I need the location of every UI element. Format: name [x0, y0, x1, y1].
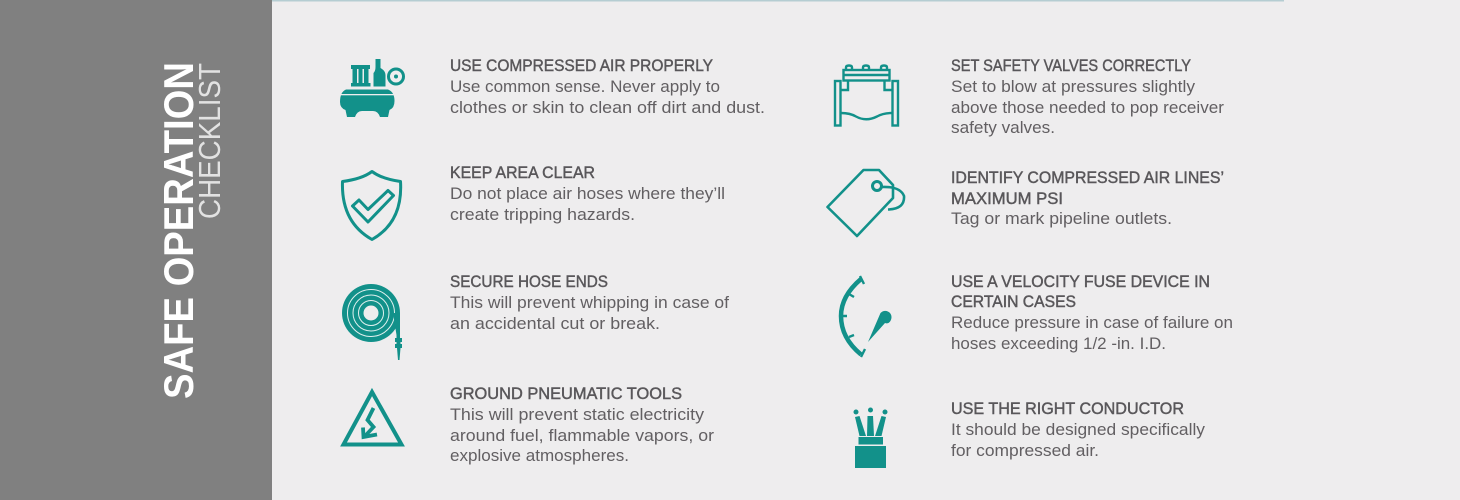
text: secure hose ends — [450, 273, 729, 333]
heading: safe operation: SAFE OPERATION — [155, 62, 202, 399]
text: ground pneumatic tools: GROUND PNEUMATIC TOOLS — [450, 385, 682, 403]
text: identify compressed air lines — [951, 169, 1224, 228]
panel: use a velocity fuse device — [841, 273, 1233, 357]
panel: sidebar — [0, 0, 272, 500]
panel: use the right conductor — [854, 400, 1206, 468]
text: use the right conductor: for compressed air. — [951, 442, 1099, 460]
text: identify compressed air lines: MAXIMUM PSI — [951, 190, 1063, 208]
text: secure hose ends: SECURE HOSE ENDS — [450, 273, 608, 291]
icon: velocity gauge — [841, 276, 892, 357]
text: set safety valves correctly: above those needed to pop receiver — [951, 99, 1225, 117]
text: use a velocity fuse device — [951, 273, 1233, 353]
text: keep area clear: Do not place air hoses where they’ll — [450, 185, 725, 203]
icon: conductor cable — [854, 408, 888, 468]
text: identify compressed air lines: IDENTIFY COMPRESSED AIR LINES’ — [951, 169, 1224, 187]
panel: identify compressed air lines — [828, 169, 1224, 236]
text: use the right conductor — [951, 400, 1206, 460]
icon: shield with check — [342, 172, 401, 240]
text: use a velocity fuse device: hoses exceeding 1/2 -in. I.D. — [951, 335, 1166, 353]
subheading: checklist: CHECKLIST — [192, 63, 227, 219]
icon: electrical warning triangle — [344, 392, 402, 444]
text: keep area clear — [450, 164, 725, 224]
text: secure hose ends: an accidental cut or break. — [450, 315, 660, 333]
text: use a velocity fuse device: USE A VELOCITY FUSE DEVICE IN — [951, 273, 1210, 291]
text: set safety valves correctly: SET SAFETY VALVES CORRECTLY — [951, 57, 1191, 75]
icon: coiled hose — [342, 284, 402, 360]
text: use compressed air properly: USE COMPRESSED AIR PROPERLY — [450, 57, 713, 75]
panel: secure hose ends — [342, 273, 729, 360]
text: use a velocity fuse device: Reduce pressure in case of failure on — [951, 314, 1233, 332]
text: use a velocity fuse device: CERTAIN CASES — [951, 293, 1076, 311]
text: use compressed air properly: Use common sense. Never apply to — [450, 78, 720, 96]
text: ground pneumatic tools — [450, 385, 715, 465]
panel: keep area clear — [342, 164, 725, 240]
icon: air compressor — [340, 59, 404, 117]
text: set safety valves correctly — [951, 57, 1225, 137]
text: keep area clear: create tripping hazards. — [450, 206, 635, 224]
text: ground pneumatic tools: around fuel, flammable vapors, or — [450, 427, 715, 445]
text: secure hose ends: This will prevent whipping in case of — [450, 294, 729, 312]
text: set safety valves correctly: Set to blow at pressures slightly — [951, 78, 1196, 96]
text: ground pneumatic tools: This will prevent static electricity — [450, 406, 705, 424]
icon: safety valve — [835, 66, 898, 126]
text: ground pneumatic tools: explosive atmospheres. — [450, 447, 629, 465]
text: identify compressed air lines: Tag or mark pipeline outlets. — [951, 210, 1172, 228]
text: use the right conductor: It should be designed specifically — [951, 421, 1206, 439]
panel: set safety valves correctly — [835, 57, 1225, 137]
icon: tag — [828, 170, 904, 236]
text: use compressed air properly: clothes or skin to clean off dirt and dust. — [450, 99, 765, 117]
text: use the right conductor: USE THE RIGHT CONDUCTOR — [951, 400, 1184, 418]
text: set safety valves correctly: safety valves. — [951, 119, 1055, 137]
panel: ground pneumatic tools — [344, 385, 715, 465]
panel: use compressed air properly — [340, 57, 765, 117]
text: use compressed air properly — [450, 57, 765, 117]
text: keep area clear: KEEP AREA CLEAR — [450, 164, 595, 182]
